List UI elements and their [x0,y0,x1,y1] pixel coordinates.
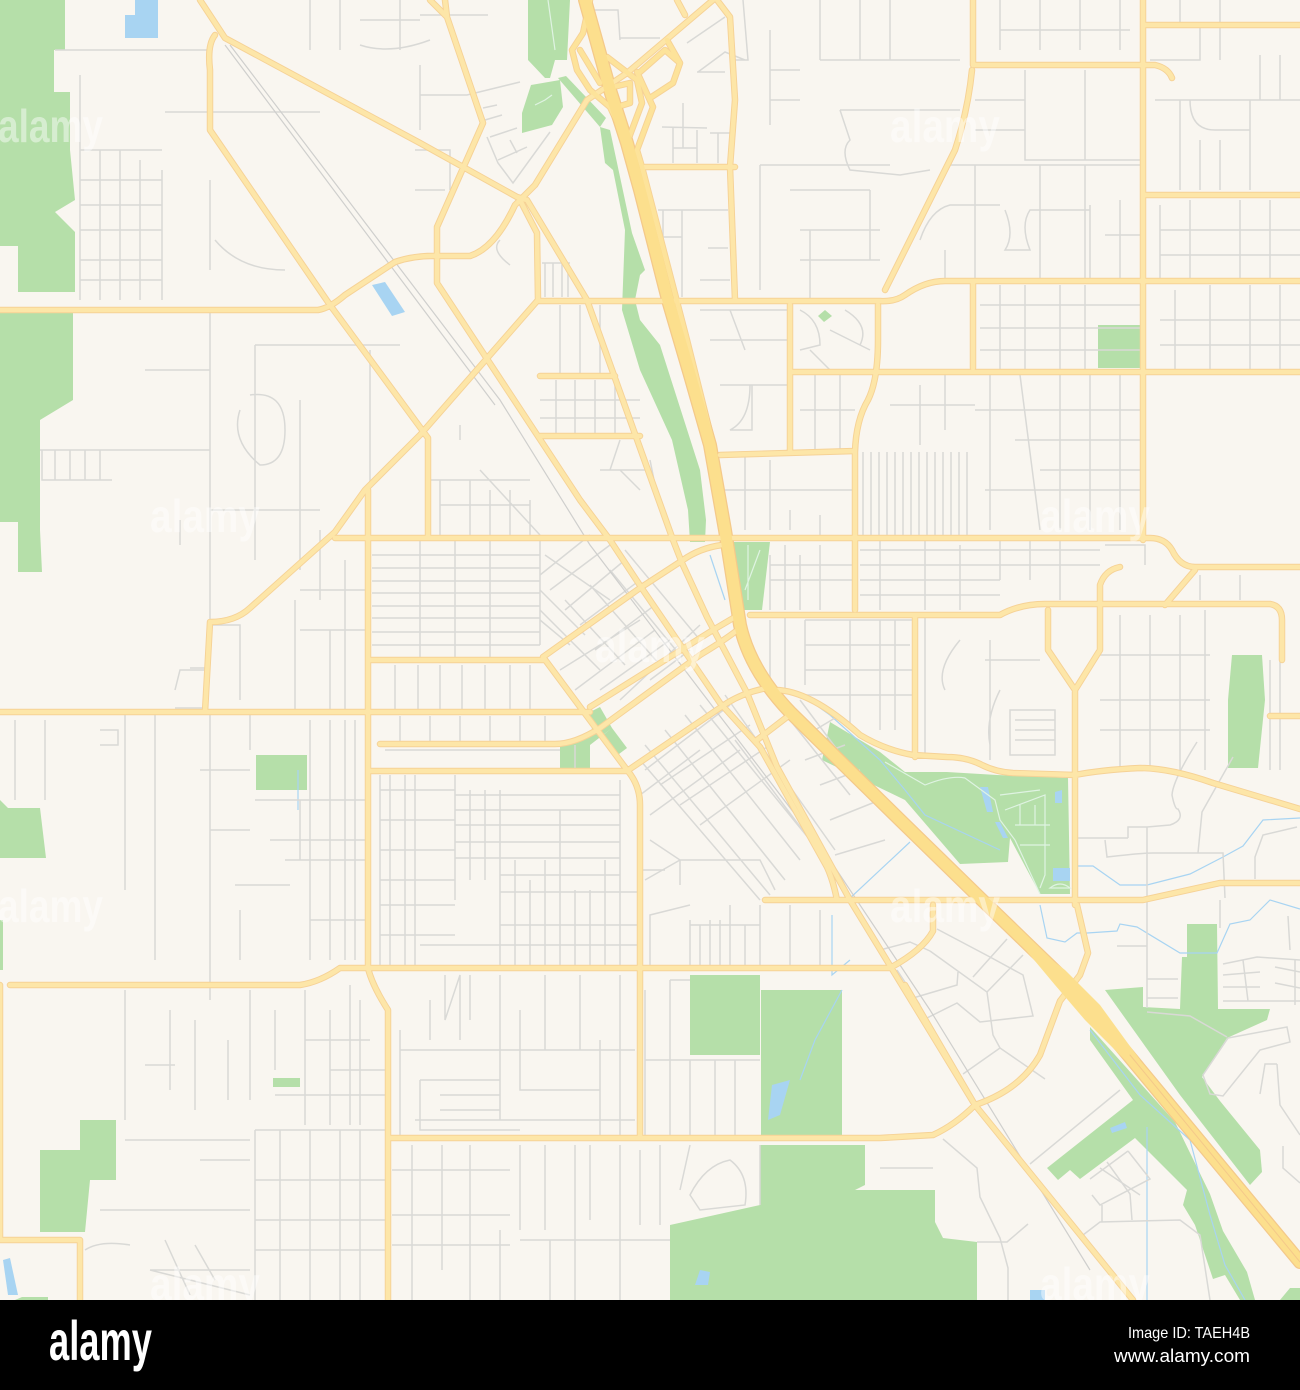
watermarks: alamy [0,100,103,152]
park paths [535,0,1070,894]
website: www.alamy.com [1113,1346,1250,1366]
watermarks: alamy [595,620,705,672]
railway [225,45,1090,1270]
watermarks: alamy [0,880,103,932]
watermarks: alamy [150,490,260,542]
footer logo: alamy [49,1309,152,1372]
watermarks [0,100,1150,1310]
watermarks: alamy [1040,1258,1150,1310]
watermarks: alamy [890,100,1000,152]
watermarks: alamy [150,1258,260,1310]
watermarks: alamy [1040,490,1150,542]
image id: Image ID: TAEH4B [1128,1325,1250,1342]
watermarks: alamy [890,880,1000,932]
footer bar [0,1300,1300,1390]
